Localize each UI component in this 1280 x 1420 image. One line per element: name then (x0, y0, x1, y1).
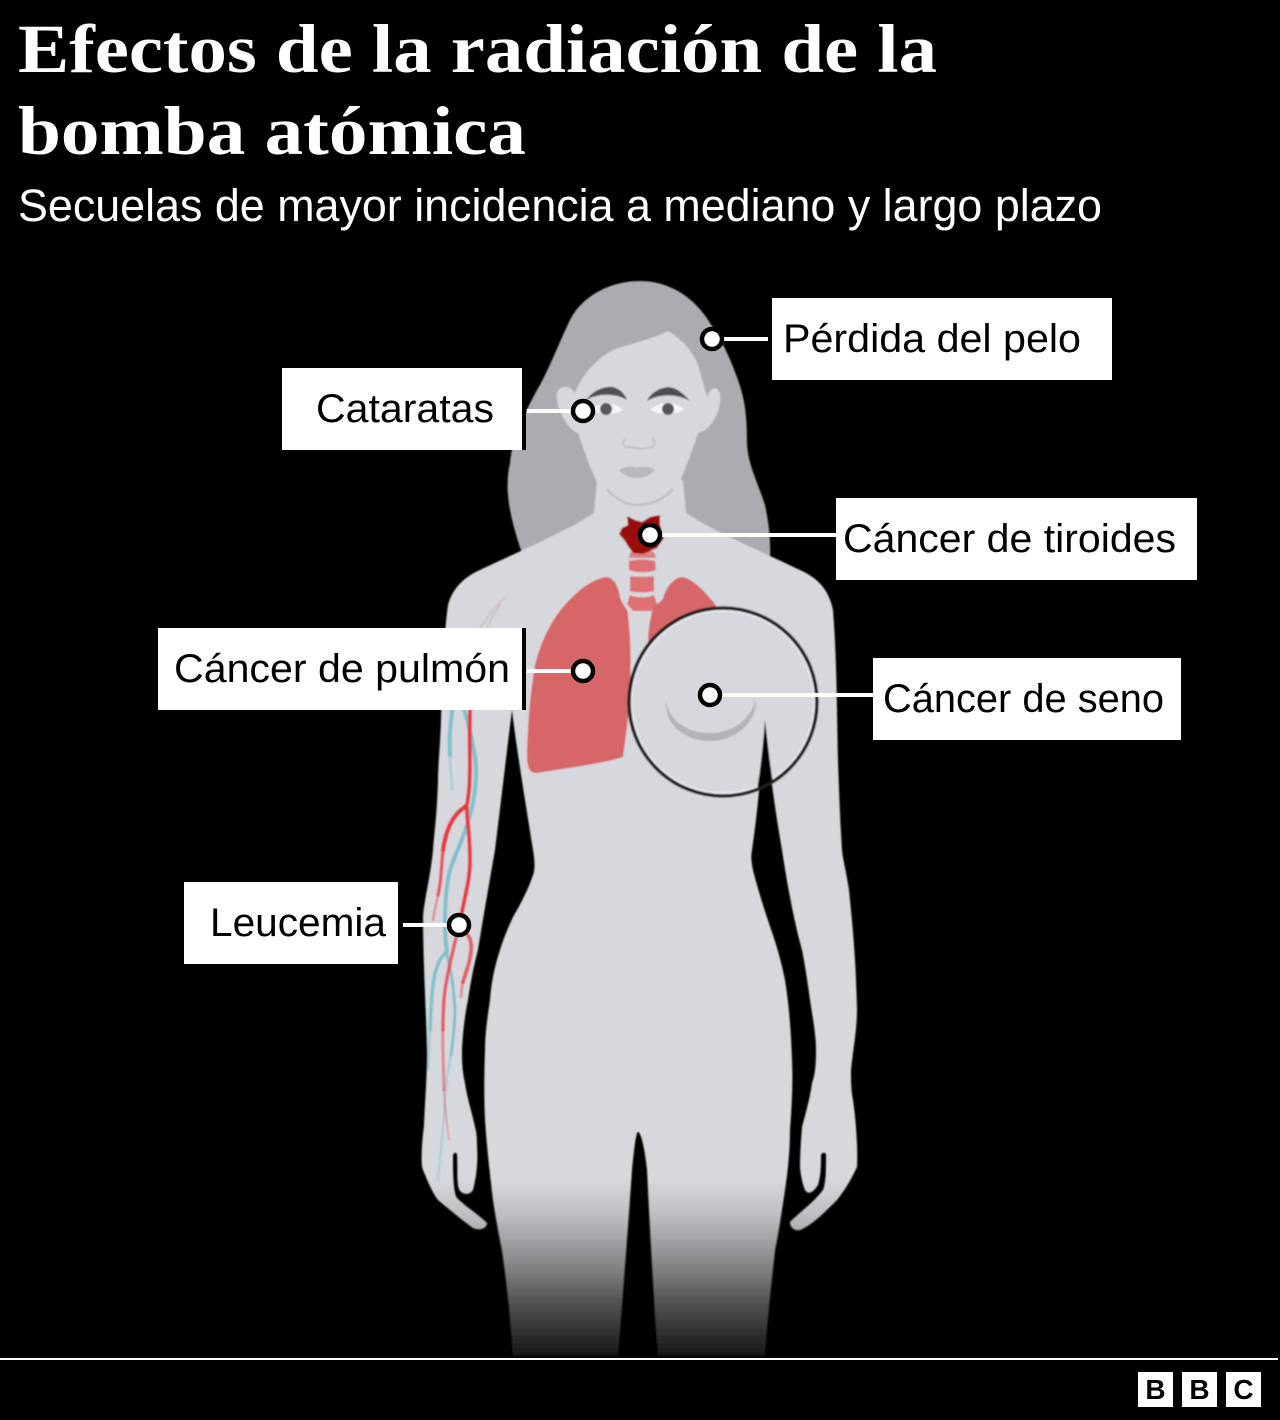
BBC logo: B (1189, 1374, 1210, 1405)
label: Cataratas (282, 368, 593, 450)
facial features (586, 387, 690, 505)
title (18, 11, 937, 169)
body silhouette (422, 480, 857, 1356)
BBC logo (1138, 1372, 1261, 1407)
bottom fade (400, 1178, 880, 1356)
title: Efectos de la radiación de la (18, 11, 937, 87)
BBC logo: C (1233, 1374, 1254, 1405)
right lung (648, 577, 717, 645)
label: Cáncer de seno (700, 658, 1181, 740)
label: Cáncer de tiroides (640, 498, 1197, 580)
thyroid tumour (619, 515, 664, 554)
footer rule (0, 1358, 1278, 1360)
label: Cáncer de seno: Cáncer de seno (883, 677, 1164, 721)
title: bomba atómica (18, 93, 526, 169)
label: Cataratas: Cataratas (316, 387, 494, 431)
subtitle: Secuelas de mayor incidencia a mediano y largo plazo (18, 180, 1102, 231)
label: Leucemia (184, 882, 469, 964)
breast detail circle (629, 608, 817, 810)
label: Cáncer de pulmón (158, 628, 593, 710)
label: Pérdida del pelo: Pérdida del pelo (783, 317, 1081, 361)
human body figure (400, 281, 880, 1356)
label: Pérdida del pelo (702, 298, 1112, 380)
trachea (627, 549, 657, 611)
label: Leucemia: Leucemia (210, 901, 387, 945)
label: Cáncer de tiroides: Cáncer de tiroides (843, 517, 1176, 561)
arm blood vessels (428, 598, 505, 1180)
label: Cáncer de pulmón: Cáncer de pulmón (174, 647, 510, 691)
left lung (527, 577, 631, 773)
hair (508, 281, 770, 560)
face (557, 331, 720, 510)
BBC logo: B (1145, 1374, 1166, 1405)
